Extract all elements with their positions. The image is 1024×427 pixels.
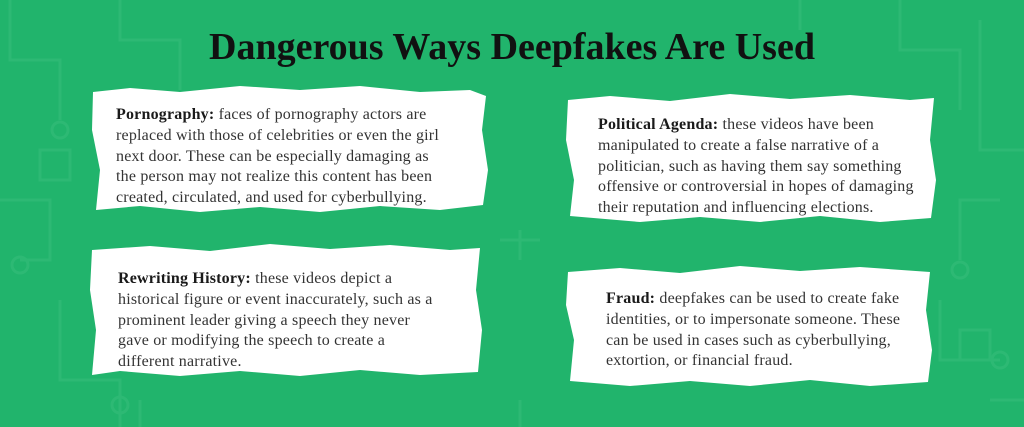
panel: fraud: [606, 290, 900, 369]
panel: pornography: the person may not realize this content has been: [116, 168, 432, 185]
panel: pornography: [116, 106, 439, 206]
panel: rewriting history: different narrative.: [118, 353, 242, 370]
panel: pornography: created, circulated, and used for cyberbullying.: [116, 189, 427, 206]
panel: rewriting history: prominent leader giving a speech they never: [118, 312, 410, 329]
panel: political agenda: [598, 116, 914, 216]
panel: pornography: next door. These can be especially damaging as: [116, 148, 429, 165]
panel: political agenda: their reputation and influencing elections.: [598, 199, 874, 216]
panel: fraud: Fraud: deepfakes can be used to create fake: [606, 290, 899, 307]
panel: political agenda: offensive or controversial in hopes of damaging: [598, 178, 914, 195]
panel: fraud: identities, or to impersonate someone. These: [606, 311, 900, 328]
panel: political agenda: manipulated to create a false narrative of a: [598, 137, 879, 154]
panel: political agenda: politician, such as having them say something: [598, 158, 902, 175]
title: Dangerous Ways Deepfakes Are Used: [209, 26, 815, 68]
panel: fraud: extortion, or financial fraud.: [606, 352, 793, 369]
panel: pornography: replaced with those of celebrities or even the girl: [116, 127, 439, 144]
panel: rewriting history: Rewriting History: these videos depict a: [118, 270, 392, 287]
panel: fraud: can be used in cases such as cyberbullying,: [606, 332, 891, 349]
panel: rewriting history: [118, 270, 433, 370]
panel: political agenda: Political Agenda: these videos have been: [598, 116, 874, 133]
panel: rewriting history: gave or modifying the speech to create a: [118, 332, 385, 349]
panel: pornography: Pornography: faces of pornography actors are: [116, 106, 426, 123]
panel: rewriting history: historical figure or event inaccurately, such as a: [118, 291, 433, 308]
